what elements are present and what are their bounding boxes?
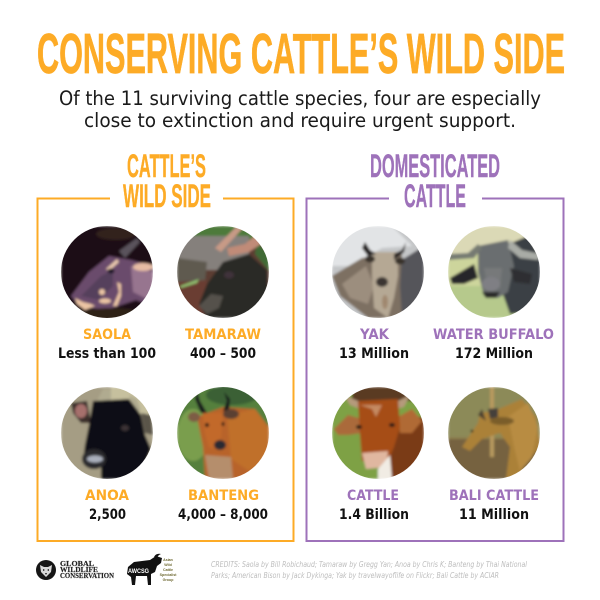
panel heading: domesticated cattle [370, 148, 500, 214]
species: cattle [332, 387, 424, 523]
species: saola [58, 226, 156, 362]
panel heading: cattle's wild side: WILD SIDE [123, 178, 211, 214]
value: cattle: 1.4 Billion [339, 507, 409, 523]
panel border: purple [306, 198, 564, 541]
photo: banteng [177, 385, 269, 479]
label: anoa: ANOA [85, 488, 129, 504]
photo: yak [332, 226, 424, 318]
label: water buffalo: WATER BUFFALO [433, 327, 554, 343]
photo: cattle [332, 387, 424, 479]
subtitle [59, 87, 541, 132]
logo wordmark [160, 558, 177, 582]
logo wordmark: Wild [164, 563, 172, 567]
species: banteng [177, 385, 269, 523]
photo: water buffalo [448, 226, 540, 318]
logo wordmark: CONSERVATION [60, 572, 114, 580]
species: tamaraw [177, 226, 269, 362]
photo credits [211, 560, 528, 580]
logo wordmark: Group [163, 578, 174, 582]
panel heading: domesticated cattle: CATTLE [404, 178, 466, 214]
logo: global wildlife conservation [36, 560, 114, 580]
icon: buffalo silhouette: AWCSG [128, 569, 149, 575]
value: water buffalo: 172 Million [455, 346, 533, 362]
photo: tamaraw [177, 226, 269, 318]
label: saola: SAOLA [83, 327, 131, 343]
logo wordmark: WILDLIFE [60, 566, 98, 574]
photo credits: Parks; American Bison by Jack Dykinga; Yak by travelwayoflife on Flickr; Bali Cattle by ACIAR [211, 571, 499, 580]
photo: anoa [61, 387, 153, 479]
logo wordmark [60, 560, 114, 580]
value: anoa: 2,500 [89, 507, 126, 523]
value: tamaraw: 400 – 500 [190, 346, 256, 362]
value: yak: 13 Million [339, 346, 409, 362]
value: saola: Less than 100 [58, 346, 156, 362]
logo: asian wild cattle specialist group [127, 554, 177, 585]
label: cattle: CATTLE [347, 488, 399, 504]
species: water buffalo [433, 226, 554, 362]
photo: bali cattle [448, 387, 540, 479]
logo wordmark: GLOBAL [60, 560, 94, 568]
panel heading: cattle's wild side [123, 148, 211, 214]
label: bali cattle: BALI CATTLE [449, 488, 539, 504]
label: banteng: BANTENG [188, 488, 259, 504]
subtitle: Of the 11 surviving cattle species, four are especially [59, 87, 541, 110]
value: banteng: 4,000 – 8,000 [178, 507, 268, 523]
label: tamaraw: TAMARAW [185, 327, 261, 343]
species: bali cattle [448, 387, 540, 523]
logo wordmark: Specialist [160, 573, 177, 577]
species: yak [332, 226, 424, 362]
logo wordmark: Cattle [163, 568, 173, 572]
panel: domesticated cattle [306, 148, 564, 541]
icon: tiger face emblem [36, 560, 56, 580]
logo wordmark: Asian [163, 558, 173, 562]
value: bali cattle: 11 Million [459, 507, 529, 523]
panel heading: cattle's wild side: CATTLE’S [127, 148, 206, 184]
species: anoa [61, 387, 153, 523]
photo: saola [61, 226, 153, 320]
panel border: orange [38, 198, 294, 541]
label: yak: YAK [359, 327, 390, 343]
subtitle: close to extinction and require urgent support. [84, 109, 516, 132]
panel: cattle's wild side [38, 148, 294, 541]
